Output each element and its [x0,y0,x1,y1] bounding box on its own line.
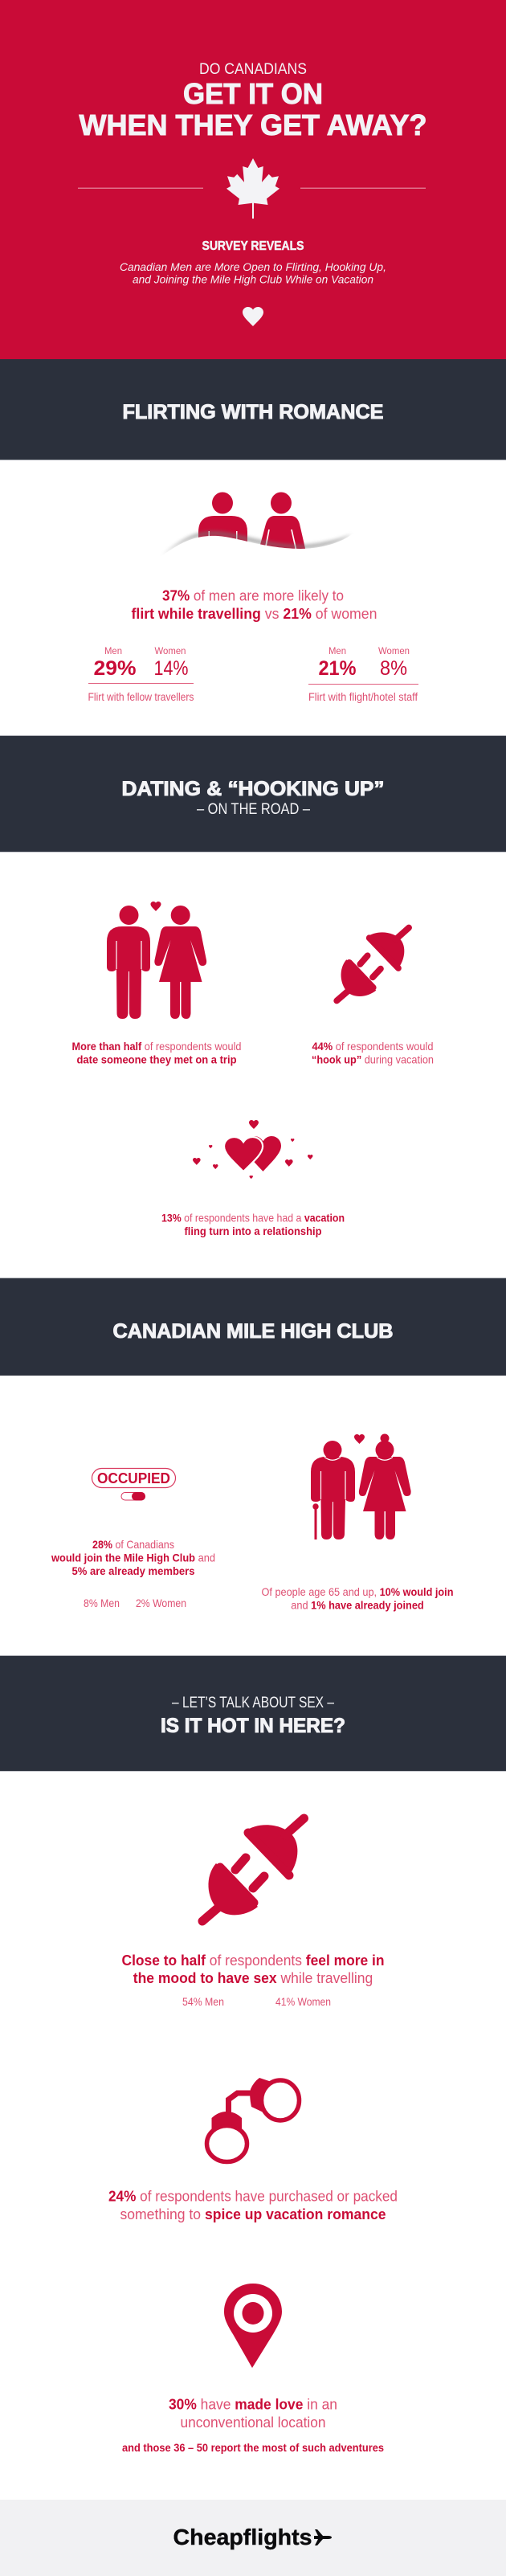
icon: map pin [224,2284,282,2368]
panel: sex heading band: IS IT HOT IN HERE? [161,1715,345,1737]
main title [79,77,427,141]
text: men and women mood split [182,1995,331,2008]
text: in the mood while travelling: Close to half of respondents feel more in [122,1952,385,1969]
panel: sex heading band [0,1655,506,1772]
stat: flirt with flight or hotel staff: Women [378,645,410,656]
text: men and women mood split: 54% Men [182,1995,224,2008]
main title: GET IT ON [183,77,323,110]
text: age group note: and those 36 – 50 report the most of such adventures [122,2442,384,2454]
text: date someone they met: date someone they met on a trip [77,1053,236,1065]
icon: plane [314,2529,332,2545]
stat: flirt with flight or hotel staff [308,645,418,703]
panel: dating heading band [0,735,506,853]
text: fling turned relationship [161,1212,345,1237]
stat: flirt with fellow travellers: 29% [93,657,137,680]
icon: maple leaf [226,158,280,219]
panel: mile high club heading band [0,1278,506,1376]
text: people aged 65 and up: Of people age 65 and up, 10% would join [262,1585,453,1598]
main title: WHEN THEY GET AWAY? [79,108,427,141]
icon: unplugged plug large [202,1818,304,1921]
text: spice up vacation romance [108,2189,398,2222]
text: spice up vacation romance: 24% of respondents have purchased or packed [108,2189,398,2205]
title kicker: DO CANADIANS [199,61,307,78]
survey heading: SURVEY REVEALS [202,239,304,253]
panel: dating heading band: DATING & “HOOKING UP” [122,778,384,800]
text: date someone they met: More than half of respondents would [72,1040,241,1053]
text: men and women mood split: 41% Women [275,1995,331,2008]
text: would join mile high club: 28% of Canadians [92,1538,174,1551]
stat: flirt with flight or hotel staff: Flirt with flight/hotel staff [308,690,418,703]
text: spice up vacation romance: something to spice up vacation romance [120,2206,386,2222]
text: hook up during vacation: 44% of respondents would [312,1040,434,1053]
panel: dating heading band: – ON THE ROAD – [197,801,310,818]
icon: occupied sign [92,1469,175,1501]
panel: red title banner [0,0,506,359]
panel: mile high club heading band: CANADIAN MILE HIGH CLUB [112,1320,394,1343]
panel: sex heading band: – LET’S TALK ABOUT SEX – [172,1695,334,1711]
text: flirting headline stat [132,588,377,622]
text: unconventional location [169,2396,337,2431]
text: men and women member split [84,1597,186,1609]
icon: cluster of hearts [193,1120,313,1179]
text: people aged 65 and up [262,1585,453,1612]
stat: flirt with fellow travellers [88,645,194,703]
text: in the mood while travelling: the mood to have sex while travelling [133,1970,373,1986]
panel: flirting heading band: FLIRTING WITH ROMANCE [122,401,383,423]
text: would join mile high club: 5% are already members [72,1564,195,1577]
text: people aged 65 and up: and 1% have already joined [291,1599,424,1612]
logo wordmark: Cheapflights [173,2525,312,2549]
stat: flirt with flight or hotel staff: 21% [318,657,357,680]
text: men and women member split: 8% Men [84,1597,120,1609]
stat: flirt with fellow travellers: Flirt with fellow travellers [88,690,194,703]
stat: flirt with fellow travellers: Women [154,645,186,656]
icon: handcuffs [207,2078,299,2161]
stat: flirt with fellow travellers: Men [104,645,122,656]
text: flirting headline stat: flirt while travelling vs 21% of women [132,606,377,622]
text: would join mile high club [51,1538,215,1577]
stat: flirt with fellow travellers: 14% [154,657,188,680]
panel: footer logo [0,2500,506,2576]
text: in the mood while travelling [122,1952,385,1986]
text: date someone they met [72,1040,241,1065]
stat: flirt with flight or hotel staff: Men [328,645,346,656]
text: fling turned relationship: 13% of respondents have had a vacation [161,1212,345,1225]
panel: flirting heading band [0,359,506,460]
icon: couple in bed [153,492,361,583]
text: men and women member split: 2% Women [136,1597,186,1609]
stat: flirt with flight or hotel staff: 8% [380,657,407,680]
icon: heart [243,307,263,326]
text: hook up during vacation [312,1040,434,1065]
icon: occupied sign: OCCUPIED [97,1470,170,1486]
text: unconventional location: unconventional location [180,2414,326,2431]
text: hook up during vacation: “hook up” during vacation [312,1053,434,1065]
survey subtitle: and Joining the Mile High Club While on Vacation [133,273,373,286]
text: unconventional location: 30% have made love in an [169,2396,337,2412]
text: flirting headline stat: 37% of men are more likely to [162,588,344,604]
text: fling turned relationship: fling turn into a relationship [185,1225,321,1237]
icon: older couple [311,1433,411,1539]
survey subtitle [120,260,386,286]
icon: man and woman couple [107,902,206,1019]
icon: unplugged plug small [337,928,409,1000]
text: would join mile high club: would join the Mile High Club and [51,1551,215,1564]
survey subtitle: Canadian Men are More Open to Flirting, Hooking Up, [120,260,386,273]
